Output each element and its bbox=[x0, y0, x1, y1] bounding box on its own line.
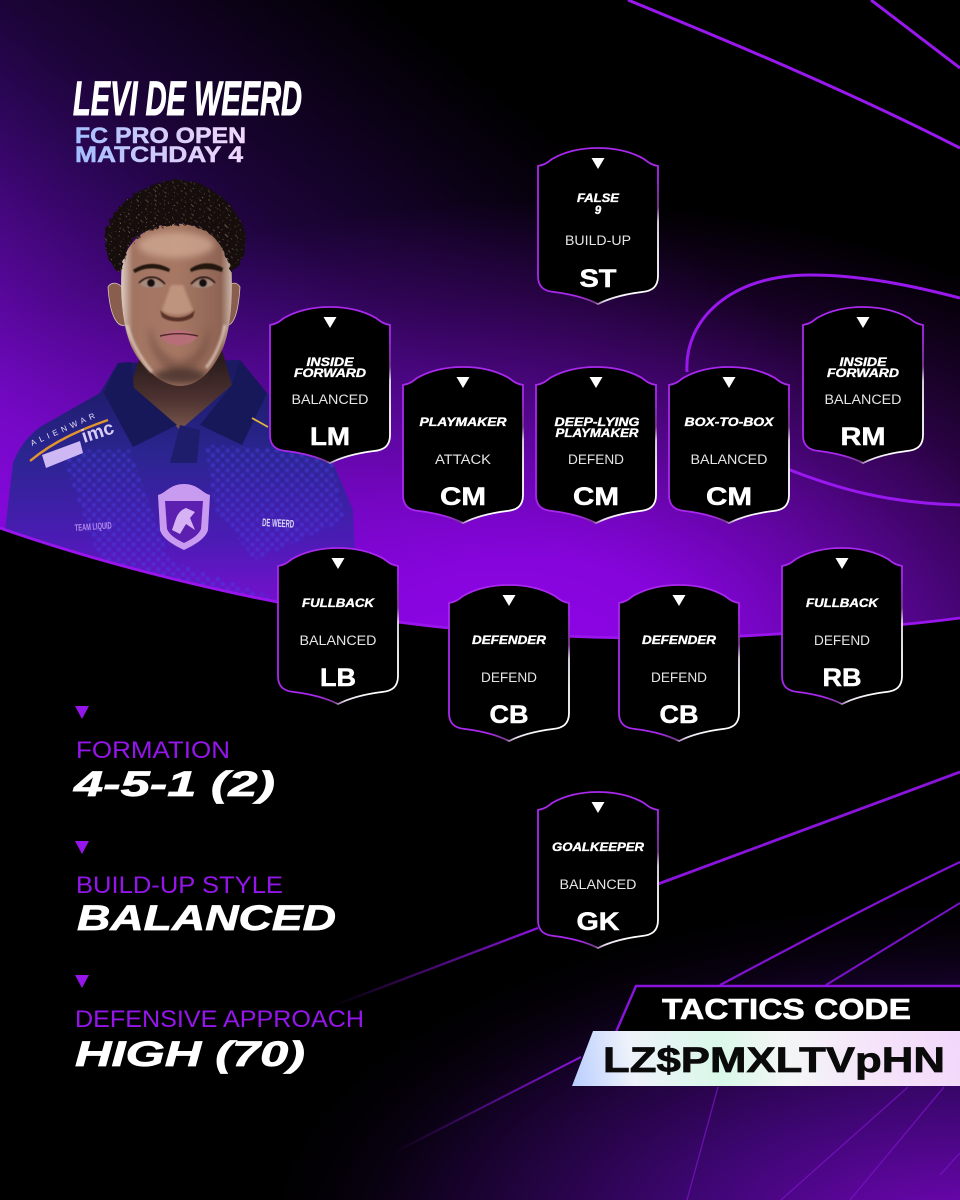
nose bbox=[162, 285, 193, 314]
card: LB: LB bbox=[320, 664, 356, 692]
neck bbox=[131, 350, 232, 430]
eyes bbox=[139, 277, 215, 288]
lower background lines bbox=[330, 772, 960, 1200]
card: LM bbox=[270, 307, 390, 463]
team liquid text: TEAM LIQUID bbox=[74, 520, 112, 534]
crest bbox=[158, 484, 210, 550]
stat: formation: FORMATION bbox=[76, 737, 230, 764]
sponsor alienware: ALIENWAR bbox=[29, 410, 100, 448]
sponsor imc: imc bbox=[79, 418, 117, 448]
subtitle: matchday: MATCHDAY 4 bbox=[75, 142, 244, 167]
upper background curved lines bbox=[628, 0, 960, 505]
collar gold trim bbox=[252, 418, 268, 427]
card: RM: BALANCED bbox=[824, 392, 902, 407]
tactics code value bbox=[572, 1031, 960, 1086]
card: CM deep-lying playmaker: DEEP-LYING bbox=[554, 417, 640, 429]
card: GK bbox=[538, 792, 658, 948]
card: LB: FULLBACK bbox=[302, 598, 375, 610]
stat: build-up style: BALANCED bbox=[77, 899, 336, 938]
card: CB right: DEFEND bbox=[651, 670, 707, 685]
card: RM: INSIDE bbox=[840, 357, 887, 369]
card: CM deep-lying playmaker: PLAYMAKER bbox=[556, 428, 639, 440]
card: RB bbox=[782, 548, 902, 704]
name on jersey: DE WEERD bbox=[262, 517, 294, 531]
stat: defensive approach bbox=[75, 975, 364, 1074]
jersey halftone bbox=[60, 445, 345, 600]
card: ST: FALSE bbox=[577, 193, 619, 205]
card: ST bbox=[538, 148, 658, 304]
card: RB: FULLBACK bbox=[806, 598, 879, 610]
player photo illustration bbox=[5, 180, 357, 600]
card: CM deep-lying playmaker: DEFEND bbox=[568, 452, 624, 467]
cheek shadow bbox=[149, 325, 209, 376]
stat: build-up style: BUILD-UP STYLE bbox=[76, 872, 283, 899]
card: CB right bbox=[619, 585, 739, 741]
forehead light bbox=[138, 232, 214, 258]
stat: formation bbox=[73, 706, 275, 804]
card: CM box-to-box: BALANCED bbox=[690, 452, 768, 467]
card: ST: ST bbox=[580, 265, 616, 293]
card: CM box-to-box: CM bbox=[706, 483, 752, 511]
collar right bbox=[200, 360, 267, 445]
card: CB left: CB bbox=[490, 701, 528, 729]
tactics code panel: LZ$PMXLTVpHN bbox=[603, 1041, 945, 1080]
sponsor checker bbox=[42, 441, 83, 468]
card: CM playmaker: ATTACK bbox=[435, 452, 491, 467]
jaw highlights bbox=[127, 325, 225, 372]
card: LM: BALANCED bbox=[292, 392, 369, 407]
shoulder stripe bbox=[30, 420, 108, 461]
tactics code panel: TACTICS CODE bbox=[662, 994, 911, 1026]
brows bbox=[133, 263, 223, 273]
card: GK: GOALKEEPER bbox=[552, 842, 645, 854]
bottom purple glow bbox=[240, 890, 960, 1200]
card: CM playmaker bbox=[403, 367, 523, 523]
stat: formation: 4-5-1 (2) bbox=[73, 765, 275, 804]
jersey bbox=[5, 360, 357, 600]
card: CM deep-lying playmaker: CM bbox=[573, 483, 619, 511]
title: player name: LEVI DE WEERD bbox=[73, 73, 302, 126]
card: RM: RM bbox=[840, 423, 886, 451]
subtitle: event: FC PRO OPEN bbox=[75, 123, 246, 148]
card: LM: INSIDE bbox=[306, 357, 354, 369]
card: RB: DEFEND bbox=[814, 633, 870, 648]
card: CM playmaker: CM bbox=[440, 483, 486, 511]
hair bbox=[105, 180, 246, 274]
card: LM: LM bbox=[310, 423, 350, 451]
lower black panel bbox=[0, 528, 960, 1200]
card: CB right: CB bbox=[660, 701, 698, 729]
ears bbox=[108, 283, 126, 326]
card: LM: FORWARD bbox=[294, 368, 366, 380]
card: GK: GK bbox=[576, 908, 620, 936]
card: LB bbox=[278, 548, 398, 704]
card: CM box-to-box bbox=[669, 367, 789, 523]
card: CB left: DEFEND bbox=[481, 670, 537, 685]
card: CB right: DEFENDER bbox=[642, 635, 717, 647]
card: CB left: DEFENDER bbox=[472, 635, 547, 647]
collar left bbox=[104, 362, 177, 447]
card: CM deep-lying playmaker bbox=[536, 367, 656, 523]
placket bbox=[170, 425, 200, 463]
card: RM: FORWARD bbox=[827, 368, 899, 380]
card: ST: 9 bbox=[595, 205, 602, 217]
card: RB: RB bbox=[822, 664, 862, 692]
card: RM bbox=[803, 307, 923, 463]
card: CM playmaker: PLAYMAKER bbox=[420, 417, 507, 429]
head bbox=[121, 224, 232, 386]
tactics code header bbox=[616, 986, 960, 1032]
stat: defensive approach: HIGH (70) bbox=[75, 1035, 305, 1074]
mouth bbox=[160, 330, 198, 345]
card: ST: BUILD-UP bbox=[565, 233, 631, 248]
tactics code panel bbox=[572, 986, 960, 1086]
card: GK: BALANCED bbox=[560, 877, 637, 892]
stat: defensive approach: DEFENSIVE APPROACH bbox=[75, 1006, 364, 1033]
chin stubble bbox=[154, 368, 206, 384]
stat: build-up style bbox=[75, 841, 336, 938]
card: CM box-to-box: BOX-TO-BOX bbox=[684, 417, 775, 429]
card: LB: BALANCED bbox=[300, 633, 377, 648]
card: CB left bbox=[449, 585, 569, 741]
